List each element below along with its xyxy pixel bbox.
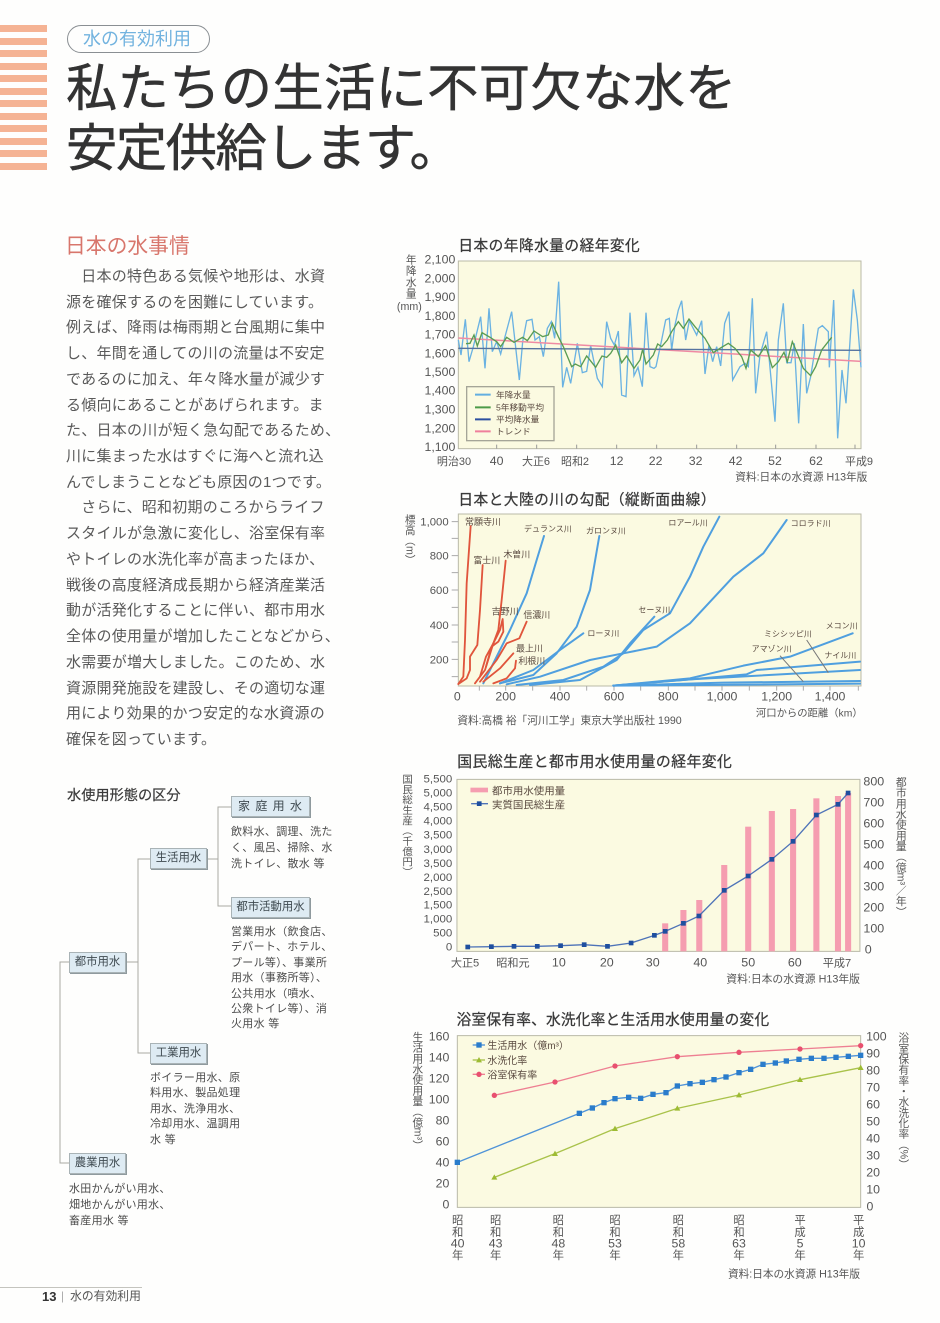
- y axis title: 標高（m）: [404, 513, 416, 566]
- x axis labels: 和: [673, 1226, 684, 1239]
- right axis labels: 800: [863, 774, 884, 788]
- left axis labels: 100: [429, 1093, 449, 1107]
- river labels: デュランス川: [524, 524, 572, 534]
- text: 都市活動用水: プール等）、事業所: [231, 957, 327, 969]
- x axis labels: 年: [673, 1248, 684, 1262]
- footer section name: | 水の有効利用: [61, 1289, 141, 1303]
- right axis labels: 50: [866, 1115, 880, 1129]
- river labels: [465, 516, 858, 666]
- left axis labels: 20: [436, 1177, 449, 1191]
- river labels: ガロンヌ川: [586, 525, 626, 535]
- bars: urban water use: [662, 793, 851, 951]
- y axis labels: 2,100: [424, 253, 455, 267]
- left axis labels: 500: [433, 928, 452, 940]
- left axis labels: 160: [429, 1030, 449, 1044]
- text: 都市活動用水: 公衆トイレ等）、消: [231, 1003, 327, 1015]
- x axis labels: 成: [794, 1226, 806, 1239]
- right axis labels: 400: [863, 858, 884, 872]
- text: 工業用水: 冷却用水、温調用: [150, 1118, 240, 1130]
- x axis labels: 年: [490, 1248, 501, 1262]
- legend: 実質国民総生産: [492, 799, 565, 812]
- box: 都市用水: [69, 952, 126, 973]
- text: 農業用水: [69, 1182, 171, 1227]
- x axis labels: 昭: [452, 1214, 463, 1227]
- right axis labels: 300: [863, 879, 884, 893]
- x axis labels: 50: [741, 956, 755, 970]
- x axis labels: 53: [608, 1237, 622, 1251]
- river labels: メコン川: [826, 622, 858, 631]
- left axis labels: 0: [446, 942, 452, 954]
- river labels: ローヌ川: [587, 629, 619, 638]
- left axis labels: 5,000: [424, 788, 452, 800]
- text: 工業用水: [150, 1072, 240, 1146]
- body text: 資源開発施設を建設し、その適切な運: [66, 680, 325, 696]
- x axis labels: [451, 956, 851, 970]
- right axis labels: 100: [863, 921, 884, 935]
- body text: んでしまうことなども原因の1つです。: [66, 474, 331, 491]
- decorative stripe block: [0, 25, 47, 170]
- body text: であるのに加え、年々降水量が減少す: [66, 371, 325, 388]
- left axis labels: 60: [436, 1135, 449, 1149]
- legend: [467, 387, 554, 441]
- left axis labels: 120: [429, 1072, 449, 1086]
- y axis labels: 1,100: [424, 440, 455, 454]
- text: 工業用水: ボイラー用水、原: [150, 1072, 240, 1084]
- legend: 5年移動平均: [496, 401, 544, 412]
- x axis labels: 600: [604, 690, 624, 704]
- box: 都市活動用水: [231, 897, 310, 918]
- title: 安定供給します。: [66, 120, 459, 177]
- text: 家庭用水: 洗トイレ、散水 等: [231, 858, 325, 870]
- x axis labels: [437, 454, 873, 468]
- river labels: ミシシッピ川: [764, 630, 812, 639]
- x axis labels: 昭: [553, 1214, 564, 1227]
- y axis labels: 800: [430, 551, 449, 563]
- left axis labels: [429, 1030, 449, 1212]
- x axis labels: 43: [489, 1237, 503, 1251]
- line: real GNP: [465, 791, 850, 949]
- right axis labels: 0: [866, 1199, 873, 1213]
- x axis labels: [451, 1214, 866, 1262]
- x axis labels: 10: [852, 1237, 866, 1251]
- y axis labels: 600: [430, 585, 449, 597]
- x axis labels: 42: [729, 454, 743, 468]
- text: 工業用水: 用水、洗浄用水、: [150, 1103, 240, 1115]
- x axis labels: 30: [646, 956, 660, 970]
- right axis labels: 100: [866, 1030, 887, 1044]
- x axis labels: 年: [733, 1248, 745, 1262]
- right axis title: 浴室保有率・水洗化率（%）: [897, 1032, 909, 1170]
- legend: 平均降水量: [496, 414, 540, 425]
- x axis labels: 昭: [490, 1214, 501, 1227]
- box: 都市活動用水: 都市活動用水: [236, 901, 305, 913]
- right axis labels: 10: [866, 1183, 880, 1197]
- y axis labels: [420, 517, 449, 666]
- body text: 動が活発化することに伴い、都市用水: [66, 602, 325, 619]
- category pill: 水の有効利用: [83, 29, 191, 49]
- box: 工業用水: 工業用水: [156, 1047, 201, 1059]
- line: five-year moving average: [466, 319, 832, 376]
- section heading: 日本の水事情: [65, 235, 190, 258]
- body text: 日本の特色ある気候や地形は、水資: [81, 268, 325, 285]
- x axis labels: 60: [788, 956, 802, 970]
- y axis title: 年降水量: [405, 253, 417, 299]
- plot background: [457, 779, 860, 951]
- body text: 用により効果的かつ安定的な水資源の: [66, 705, 325, 722]
- tree heading: 水使用形態の区分: [67, 788, 181, 804]
- right axis labels: 500: [863, 837, 884, 851]
- box: 農業用水: 農業用水: [75, 1157, 120, 1169]
- x axis labels: 62: [809, 454, 823, 468]
- x axis labels: 1,200: [761, 690, 792, 704]
- x axis labels: 和: [733, 1226, 745, 1239]
- legend: 生活用水（億m³）: [487, 1039, 569, 1052]
- y axis labels: 1,400: [424, 384, 455, 398]
- x axis labels: 大正5: [451, 956, 479, 970]
- x axis labels: 400: [550, 690, 570, 704]
- text: 家庭用水: く、風呂、掃除、水: [231, 842, 333, 854]
- x axis labels: 平: [853, 1215, 864, 1227]
- box: 生活用水: [150, 848, 207, 869]
- legend: 水洗化率: [487, 1055, 527, 1067]
- text: 家庭用水: 飲料水、調理、洗た: [231, 826, 333, 838]
- x axis labels: 40: [451, 1237, 465, 1251]
- body text: 源を確保するのを困難にしています。: [66, 294, 323, 311]
- river labels: コロラド川: [791, 519, 831, 528]
- body text: 戦後の高度経済成長期から経済産業活: [66, 577, 325, 594]
- legend: [470, 784, 565, 812]
- y axis labels: 1,200: [424, 421, 455, 435]
- right axis labels: 60: [866, 1098, 880, 1112]
- right axis labels: 700: [863, 795, 884, 809]
- x axis labels: 40: [693, 956, 707, 970]
- chart title: 浴室保有率、水洗化率と生活用水使用量の変化: [457, 1011, 769, 1028]
- chart title: 日本の年降水量の経年変化: [458, 238, 640, 255]
- right axis labels: 40: [866, 1132, 880, 1146]
- tree diagram: water use categories: [60, 788, 333, 1227]
- text: 都市活動用水: 営業用水（飲食店、: [231, 926, 333, 938]
- plot background: [458, 261, 861, 449]
- x axis title: 河口からの距離（km）: [756, 707, 863, 720]
- right axis title: 都市用水使用量（億m³／年）: [895, 777, 907, 917]
- x axis labels: 昭: [673, 1214, 684, 1227]
- right axis labels: 200: [863, 900, 884, 914]
- x axis labels: 大正6: [522, 454, 550, 468]
- y axis labels: 200: [430, 654, 449, 666]
- x axis labels: 和: [452, 1226, 463, 1239]
- body text: さらに、昭和初期のころからライフ: [81, 499, 325, 516]
- line: bath ownership: [492, 1043, 863, 1098]
- x axis labels: 平成7: [823, 957, 851, 970]
- title: [66, 60, 737, 177]
- box: 農業用水: [69, 1153, 126, 1174]
- river labels: セーヌ川: [638, 606, 670, 615]
- x axis labels: 32: [689, 454, 703, 468]
- body text: 川に集まった水はすぐに海へと流れ込: [66, 448, 324, 465]
- x axis labels: 58: [671, 1237, 685, 1251]
- right axis labels: 30: [866, 1149, 880, 1163]
- Japanese rivers: [458, 526, 527, 684]
- x axis labels: 1,400: [815, 690, 846, 704]
- y axis labels: 1,700: [424, 328, 455, 342]
- line: annual precipitation: [458, 282, 861, 438]
- left axis title: 生活用水使用量（億m³）: [411, 1031, 423, 1151]
- x axis labels: 1,000: [707, 690, 738, 704]
- text: 工業用水: 水 等: [150, 1134, 176, 1146]
- x axis labels: 年: [553, 1248, 564, 1262]
- box: 家庭用水: [231, 796, 310, 817]
- plot background: [457, 1036, 861, 1207]
- right axis labels: [866, 1030, 887, 1213]
- text: 都市活動用水: 用水（事務所等）、: [231, 972, 327, 984]
- title: 私たちの生活に不可欠な水を: [66, 60, 737, 117]
- text: 農業用水: 畜産用水 等: [69, 1215, 129, 1227]
- y axis labels: 1,600: [424, 346, 455, 360]
- x axis labels: 63: [732, 1237, 746, 1251]
- footer: [0, 1287, 142, 1305]
- source: 資料:高橋 裕「河川工学」東京大学出版社 1990: [457, 714, 682, 727]
- right axis labels: 90: [866, 1047, 880, 1061]
- text: 農業用水: 畑地かんがい用水、: [69, 1199, 171, 1211]
- x axis labels: 800: [658, 690, 679, 704]
- box: 工業用水: [150, 1043, 207, 1064]
- continental rivers: [483, 517, 860, 686]
- left axis labels: 40: [436, 1156, 449, 1170]
- text: 都市活動用水: 火用水 等: [231, 1018, 280, 1030]
- chart: GNP and urban water use: [400, 754, 907, 986]
- x axis labels: 昭: [609, 1214, 621, 1227]
- y axis labels: 1,300: [424, 402, 455, 416]
- left axis labels: [424, 774, 452, 954]
- x axis labels: 40: [490, 454, 504, 468]
- body text: 例えば、降雨は梅雨期と台風期に集中: [66, 319, 325, 336]
- y axis labels: 1,500: [424, 365, 455, 379]
- river labels: 富士川: [473, 554, 500, 565]
- x axis labels: 年: [794, 1248, 806, 1262]
- left axis labels: 2,500: [424, 886, 452, 898]
- chart: river gradients: [404, 492, 863, 727]
- left axis labels: 0: [442, 1198, 449, 1212]
- left axis labels: 4,000: [424, 816, 452, 828]
- body text: [66, 268, 340, 748]
- river labels: 木曽川: [503, 549, 530, 560]
- x axis labels: 12: [610, 454, 624, 468]
- line: trend: [458, 338, 861, 361]
- y axis labels: 2,000: [424, 271, 455, 285]
- line: mean: [458, 348, 861, 350]
- y axis labels: 400: [430, 620, 449, 632]
- chart: annual precipitation: [397, 238, 873, 483]
- left axis labels: 4,500: [424, 802, 452, 814]
- river labels: 信濃川: [523, 609, 550, 620]
- x axis labels: 成: [853, 1226, 864, 1239]
- x axis labels: 和: [490, 1226, 501, 1239]
- river labels: アマゾン川: [752, 645, 792, 654]
- source: 資料:日本の水資源 H13年版: [728, 1267, 860, 1280]
- x axis labels: 年: [609, 1248, 621, 1262]
- legend: トレンド: [496, 427, 531, 437]
- y axis labels: [424, 253, 455, 454]
- x axis labels: 0: [454, 690, 461, 704]
- plot background: [458, 514, 861, 686]
- text: 工業用水: 料用水、製品処理: [150, 1087, 240, 1099]
- legend: [473, 1039, 569, 1081]
- chart title: 国民総生産と都市用水使用量の経年変化: [457, 754, 732, 771]
- legend: 年降水量: [496, 389, 531, 400]
- x axis labels: 10: [552, 956, 566, 970]
- right axis labels: 20: [866, 1166, 880, 1180]
- right axis labels: 600: [863, 816, 884, 830]
- left axis labels: 140: [429, 1051, 449, 1065]
- tree connectors: [60, 806, 231, 1164]
- box: 都市用水: 都市用水: [75, 956, 120, 968]
- x axis labels: 5: [797, 1237, 804, 1251]
- left axis title: 国民総生産（千億円）: [400, 774, 412, 877]
- body text: 確保を図っています。: [66, 731, 216, 748]
- legend: 浴室保有率: [487, 1068, 537, 1081]
- right axis labels: 70: [866, 1081, 880, 1095]
- y axis labels: 1,800: [424, 309, 455, 323]
- source: 資料:日本の水資源 H13年版: [726, 973, 860, 986]
- right axis labels: 80: [866, 1064, 880, 1078]
- leader lines: [780, 640, 828, 682]
- text: 農業用水: 水田かんがい用水、: [69, 1183, 171, 1195]
- x axis labels: 20: [600, 956, 614, 970]
- text: 都市活動用水: 公共用水（噴水、: [231, 988, 321, 1000]
- body text: る傾向にあることがあげられます。ま: [66, 397, 324, 414]
- x axis labels: 年: [853, 1248, 864, 1262]
- river labels: 吉野川: [492, 606, 519, 616]
- left axis labels: 80: [436, 1114, 449, 1128]
- chart title: 日本と大陸の川の勾配（縦断面曲線）: [458, 492, 716, 509]
- left axis labels: 2,000: [424, 872, 452, 884]
- river labels: ロアール川: [668, 518, 708, 527]
- x axis labels: 平: [794, 1215, 806, 1227]
- river labels: ナイル川: [824, 651, 856, 660]
- river labels: 利根川: [518, 655, 545, 666]
- river labels: 常願寺川: [465, 516, 501, 527]
- x axis labels: 昭和元: [496, 957, 530, 970]
- x axis labels: [454, 690, 846, 704]
- body text: スタイルが急激に変化し、浴室保有率: [66, 525, 325, 542]
- source: 資料:日本の水資源 H13年版: [735, 470, 868, 483]
- left axis labels: 1,000: [424, 914, 452, 926]
- x axis labels: 昭: [733, 1214, 745, 1227]
- left axis labels: 1,500: [424, 900, 452, 912]
- right axis labels: [863, 774, 884, 956]
- body text: 全体の使用量が増加したことなどから、: [66, 628, 340, 645]
- x axis labels: 200: [495, 690, 516, 704]
- body text: し、年間を通しての川の流量は不安定: [66, 345, 325, 362]
- line: domestic water: [455, 1053, 863, 1165]
- body text: やトイレの水洗化率が高まったほか、: [66, 551, 324, 568]
- chart: bath ownership, flush toilets and domestic water: [411, 1011, 909, 1280]
- x axis labels: 52: [768, 454, 782, 468]
- page number: 13: [42, 1289, 56, 1304]
- river labels: 最上川: [516, 644, 543, 654]
- legend: 都市用水使用量: [492, 784, 565, 797]
- x axis labels: 和: [553, 1226, 564, 1239]
- box: 生活用水: 生活用水: [156, 852, 201, 864]
- body text: た、日本の川が短く急勾配であるため、: [66, 422, 340, 439]
- x axis labels: 昭和2: [561, 455, 589, 468]
- x axis labels: 22: [649, 454, 663, 468]
- x axis labels: 明治30: [437, 454, 471, 468]
- x axis labels: 48: [551, 1237, 565, 1251]
- left axis labels: 3,500: [424, 858, 452, 870]
- y axis unit: (mm): [397, 301, 422, 313]
- category pill: [67, 25, 210, 53]
- right axis labels: 0: [865, 942, 872, 956]
- x axis labels: 年: [452, 1248, 463, 1262]
- left axis labels: 5,500: [424, 774, 452, 786]
- text: 都市活動用水: [231, 926, 333, 1030]
- text: 家庭用水: [231, 826, 333, 870]
- body text: 水需要が増大しました。このため、水: [66, 654, 325, 671]
- x axis labels: 和: [609, 1226, 621, 1239]
- y axis labels: 1,900: [424, 290, 455, 304]
- x axis labels: 平成9: [845, 455, 873, 468]
- left axis labels: 3,000: [424, 844, 452, 856]
- text: 都市活動用水: デパート、ホテル、: [231, 941, 332, 953]
- y axis labels: 1,000: [420, 517, 449, 529]
- box: 家庭用水: 家 庭 用 水: [238, 799, 303, 813]
- line: flush toilets: [491, 1065, 864, 1180]
- left axis labels: 3,500: [424, 830, 452, 842]
